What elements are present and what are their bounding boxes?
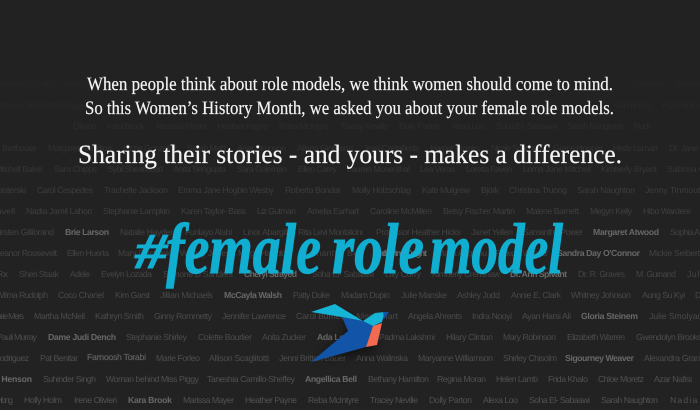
background wall of role model names: Hedy Lamarr: [613, 143, 658, 153]
background wall of role model names: Woman behind Miss Piggy: [106, 374, 200, 384]
background wall of role model names: Elizabeth Warren: [567, 332, 625, 342]
background wall of role model names: Kimberly Bryant: [601, 164, 658, 174]
background wall of role model names: Anna Walinska: [356, 353, 408, 363]
background wall of role model names: Samantha Power: [523, 227, 583, 237]
background wall of role model names: Lauren Mosenthal: [347, 164, 410, 174]
background wall of role model names: Kate Mulgrew: [422, 185, 471, 195]
background wall of role model names: Symone D Sanders: [163, 269, 234, 279]
background wall of role model names: Aung Su Kyi: [642, 290, 685, 300]
background wall of role model names: Anita Zucker: [262, 332, 306, 342]
background wall of role model names: Taneshia Camillo-Sheffey: [207, 374, 296, 384]
background wall of role model names: Sarah Metz: [187, 143, 227, 153]
background wall of role model names: Rita Levi Montalcini: [298, 227, 363, 237]
background wall of role model names: Grace Hopper: [553, 143, 603, 153]
background wall of role model names: [0, 79, 700, 405]
background wall of role model names: Ayan Harsi Ali: [522, 311, 571, 321]
background wall of role model names: Tracey Neville: [370, 395, 418, 405]
title hashtag: model: [430, 209, 563, 289]
background wall of role model names: Indra Nooyi: [472, 311, 512, 321]
background wall of role model names: Ginny Rommetty: [154, 311, 213, 321]
background wall of role model names: Malene Barnett: [526, 206, 580, 216]
background wall of role model names: Megyn Kelly: [590, 206, 633, 216]
background wall of role model names: Olivieri: [73, 121, 96, 131]
background wall of role model names: Sybil Shearwood: [108, 164, 163, 174]
background wall of role model names: Lizzie Gonzalez: [123, 143, 177, 153]
background wall of role model names: Dolly Parton: [399, 121, 440, 131]
background wall of role model names: Nicole Sanchez: [491, 143, 541, 153]
background wall of role model names: Sarah Naughton: [567, 121, 624, 131]
background wall of role model names: Sheri Staak: [19, 269, 60, 279]
background wall of role model names: Whitney Johnson: [571, 290, 631, 300]
background wall of role model names: Lea Verou: [420, 164, 455, 174]
background wall of role model names: Jessi Castañeda: [363, 143, 419, 153]
background wall of role model names: Dr. Ann Spivant: [510, 269, 567, 279]
background wall of role model names: Hilary Clinton: [446, 332, 493, 342]
background wall of role model names: Tracey Neville: [340, 121, 388, 131]
background wall of role model names: Brie Larson: [65, 227, 109, 237]
background wall of role model names: Ashley Judd: [457, 290, 500, 300]
background wall of role model names: Molly Holzschlag: [352, 185, 411, 195]
intro text: So this Women’s History Month, we asked you about your female role models.: [85, 98, 614, 119]
background wall of role model names: McCayla Walsh: [224, 290, 282, 300]
title hashtag: [134, 209, 563, 289]
background wall of role model names: Kathryn Smith: [95, 311, 144, 321]
background wall of role model names: Amelia Earhart: [307, 206, 360, 216]
background wall of role model names: Regina Moran: [437, 374, 486, 384]
background wall of role model names: Jenni Britton Bauer: [279, 353, 346, 363]
background wall of role model names: Evelyn Lozada: [101, 269, 152, 279]
background wall of role model names: Alison Hart: [355, 311, 399, 321]
background wall of role model names: Marissa Mayer: [183, 395, 234, 405]
background wall of role model names: Harriet Brooks: [430, 143, 481, 153]
subheading: Sharing their stories - and yours - makes a difference.: [78, 139, 622, 169]
background wall of role model names: Gonna Hong: [615, 100, 651, 110]
background wall of role model names: Stephanie Shirley: [126, 332, 188, 342]
background wall of role model names: Professor Heather Hicks: [376, 227, 462, 237]
background wall of role model names: Ellen Huerta: [67, 248, 109, 258]
background wall of role model names: Soha El- Sabaawi: [496, 121, 557, 131]
background wall of role model names: Trachette Jackson: [104, 185, 168, 195]
background wall of role model names: Kara Brook: [128, 395, 172, 405]
background wall of role model names: Dame Judi Dench: [48, 332, 116, 342]
background wall of role model names: Carol Cespedes: [37, 185, 94, 195]
background wall of role model names: Chloe Moretz: [598, 374, 644, 384]
background wall of role model names: Karen Taylor- Bass: [181, 206, 247, 216]
title hashtag: role: [332, 209, 424, 289]
background wall of role model names: Rebecca Wheeler: [495, 248, 548, 258]
background wall of role model names: Alexa Loo: [483, 395, 518, 405]
background wall of role model names: Angellica Bell: [305, 374, 357, 384]
background wall of role model names: Dolly Parton: [429, 395, 472, 405]
background wall of role model names: Colette Bourlier: [198, 332, 252, 342]
background wall of role model names: Björk: [481, 185, 500, 195]
background wall of role model names: Janet Yellen: [471, 227, 513, 237]
background wall of role model names: Holly Holm: [662, 100, 700, 110]
background wall of role model names: Sarah Naughton: [601, 395, 658, 405]
background wall of role model names: Annie E. Clark: [511, 290, 562, 300]
background wall of role model names: Christina Truong: [509, 185, 567, 195]
background wall of role model names: Lorna Jane Mitchell: [523, 164, 591, 174]
background wall of role model names: Reba McIntyre: [308, 395, 359, 405]
background wall of role model names: Pat Benitar: [40, 353, 78, 363]
background wall of role model names: Martha McNeil: [34, 311, 85, 321]
background wall of role model names: Alison Giordano: [297, 143, 353, 153]
background wall of role model names: Ellen Carey: [298, 164, 338, 174]
background wall of role model names: Patty Duke: [293, 290, 330, 300]
background wall of role model names: Ada Lovelace: [317, 332, 369, 342]
background wall of role model names: Liz Gutman: [257, 206, 296, 216]
background wall of role model names: Reba McIntyre: [279, 121, 329, 131]
background wall of role model names: Dr. R. Graves: [578, 269, 626, 279]
background wall of role model names: Emma Jane Hogbin Wesby: [178, 185, 275, 195]
background wall of role model names: Azar Nafisi: [654, 374, 692, 384]
background wall of role model names: Julie Manske: [401, 290, 447, 300]
background wall of role model names: Katherine Knight: [374, 248, 427, 258]
background wall of role model names: Allison Scaglitotti: [209, 353, 269, 363]
background wall of role model names: Maryanne Williamson: [418, 353, 493, 363]
background wall of role model names: Roberta Bondar: [285, 185, 341, 195]
background wall of role model names: Carol Burnett: [296, 311, 346, 321]
background wall of role model names: Mary Robinson: [503, 332, 556, 342]
background wall of role model names: Sarah Naughton: [577, 185, 635, 195]
background wall of role model names: Padma Lakshmi: [379, 332, 435, 342]
background wall of role model names: Jillian Michaels: [160, 290, 214, 300]
background wall of role model names: Betsy Fischer Martin: [443, 206, 515, 216]
background wall of role model names: Helen Lamb: [496, 374, 538, 384]
background wall of role model names: Cheryl Strayed: [244, 269, 297, 279]
background wall of role model names: Kimberly Crenshaw: [432, 269, 501, 279]
background wall of role model names: Irene Olivieri: [74, 395, 117, 405]
title hashtag: female: [166, 209, 321, 289]
icon: origami bird: [311, 304, 389, 362]
background wall of role model names: Soha El- Sabaawi: [529, 395, 590, 405]
background wall of role model names: Holly Holm: [24, 395, 62, 405]
background wall of role model names: Adele: [70, 269, 90, 279]
background wall of role model names: Jennifer Lawrence: [222, 311, 286, 321]
background wall of role model names: Natalie Hayden: [120, 227, 175, 237]
background wall of role model names: Margaret Hamilton: [48, 143, 112, 153]
background wall of role model names: Marie Forleo: [156, 353, 200, 363]
title hashtag: #: [134, 223, 168, 279]
background wall of role model names: Marissa Mayer: [156, 121, 207, 131]
background wall of role model names: Heather Payne: [217, 121, 268, 131]
background wall of role model names: Suhinder Singh: [43, 374, 96, 384]
background wall of role model names: Soha El- Sabaawi: [312, 269, 374, 279]
background wall of role model names: Sara Chipps: [54, 164, 98, 174]
background wall of role model names: Kara Brook: [107, 121, 146, 131]
background wall of role model names: Sigourney Weaver: [565, 353, 635, 363]
background wall of role model names: H. Henson: [632, 79, 665, 89]
background wall of role model names: Margaret Atwood: [593, 227, 659, 237]
background wall of role model names: Anita Sengupta: [173, 164, 226, 174]
background wall of role model names: Loretta Faven: [466, 164, 512, 174]
background wall of role model names: Frida Khalo: [548, 374, 588, 384]
background wall of role model names: Linor Abargil: [243, 227, 287, 237]
background wall of role model names: Lilly Curry: [385, 269, 422, 279]
background wall of role model names: Nadia Jamil Lahori: [26, 206, 92, 216]
background wall of role model names: Heather Payne: [245, 395, 297, 405]
background wall of role model names: Coco Chanel: [58, 290, 104, 300]
background wall of role model names: Mary Gustinski: [118, 248, 172, 258]
background wall of role model names: Hibo Wardere: [643, 206, 691, 216]
background wall of role model names: Gloria Steinem: [581, 311, 638, 321]
intro text: [85, 74, 614, 119]
background wall of role model names: Mickie Seibert: [649, 248, 700, 258]
background wall of role model names: Wendy Jones: [180, 248, 231, 258]
background wall of role model names: Sandra Day O'Connor: [557, 248, 641, 258]
background wall of role model names: Alexa Loo: [451, 121, 485, 131]
background wall of role model names: Funlayo Alabi: [185, 227, 232, 237]
background wall of role model names: Berthouse: [2, 143, 37, 153]
background wall of role model names: Angela Ahrents: [408, 311, 463, 321]
background wall of role model names: Farnoosh Torabi: [87, 352, 146, 362]
background wall of role model names: Nadi: [634, 121, 650, 131]
background wall of role model names: Sara Goleman: [237, 164, 287, 174]
background wall of role model names: Shirley Chisolm: [503, 353, 557, 363]
background wall of role model names: Bethany Hamilton: [368, 374, 429, 384]
background wall of role model names: Margot Hampton: [238, 248, 290, 258]
background wall of role model names: Samantha Bee: [303, 248, 363, 258]
intro text: When people think about role models, we think women should come to mind.: [87, 74, 613, 95]
background wall of role model names: Madam Dupin: [341, 290, 390, 300]
background wall of role model names: Stephanie Lampkin: [103, 206, 170, 216]
background wall of role model names: Kim Garst: [115, 290, 151, 300]
background wall of role model names: M. Guinand: [636, 269, 676, 279]
background wall of role model names: Caroline McMillen: [370, 206, 432, 216]
background wall of role model names: Marie Forleo: [63, 79, 105, 89]
background wall of role model names: Maya Angelou: [437, 248, 487, 258]
background wall of role model names: Anar Simpson: [237, 143, 286, 153]
